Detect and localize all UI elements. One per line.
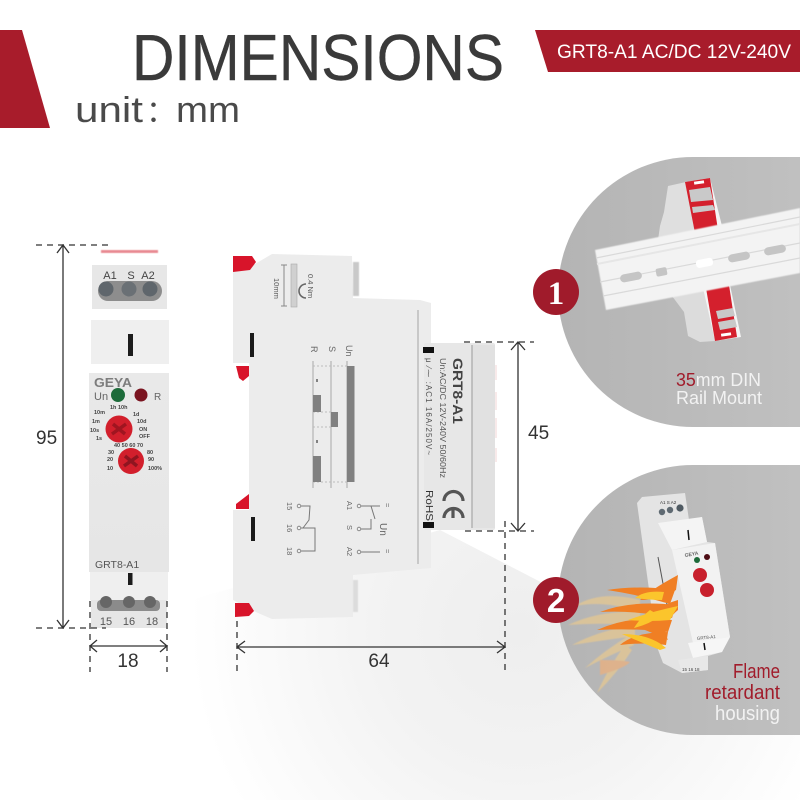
time scale labels: 10s [90,428,99,434]
dimension 45: 45 [528,423,549,444]
red corner accent [0,30,50,128]
percent scale labels: 20 [107,457,113,463]
brand logo: GEYA [94,375,133,390]
percent scale labels: 90 [148,457,154,463]
unit label: unit [75,89,143,130]
dimension 45 [464,342,549,531]
dimension 95: 95 [36,428,57,449]
wiring diagram: = [383,549,392,554]
rail caption [676,370,762,408]
time scale labels: 10d [137,419,146,425]
side view of relay [233,254,496,619]
top terminal block: A2 [141,270,155,282]
percent scale labels [107,443,162,472]
top red clip [685,178,722,234]
torque and strip note [272,264,315,307]
black markers [423,347,434,353]
status LEDs: R [154,392,161,403]
wiring diagram [285,501,392,556]
bottom terminal block: 18 [146,616,158,628]
label head [423,343,496,530]
wiring diagram: = [383,503,392,508]
mini relay [637,493,730,673]
timing diagram: S [327,346,337,352]
DIN rail [595,208,800,310]
RoHS mark: RoHS [423,490,435,521]
mini relay model: GRT8-A1 [697,634,716,641]
rail foot details [353,262,359,296]
yellow flame core [622,592,678,650]
wiring diagram: A1 [345,501,354,510]
percent scale labels: 100% [148,466,162,472]
unit label [75,89,240,130]
percent scale labels: 10 [107,466,113,472]
dimension 95 [36,245,108,628]
flame [568,575,678,693]
mini relay silhouette [637,493,730,673]
top red strip [101,250,158,253]
time scale labels: ON [139,427,147,433]
torque and strip note: 0.4 Nm [306,274,315,298]
panel background [558,157,800,427]
header [0,21,800,130]
wiring diagram: A2 [345,547,354,556]
flame caption [705,661,780,725]
divider [417,310,419,564]
number badge 1 [533,269,579,315]
bottom terminal block: 15 [100,616,112,628]
model ribbon: GRT8-A1 AC/DC 12V-240V [557,42,791,63]
upper cover block [91,320,169,364]
bottom terminal block: 16 [123,616,135,628]
flame caption: Flame [733,661,780,683]
torque and strip note: 10mm [272,278,281,299]
number badge 2: 2 [547,582,565,619]
mini relay lower block [688,637,730,658]
time scale labels: OFF [139,434,151,440]
panel background [558,465,800,735]
printed model: GRT8-A1 [450,358,465,425]
wiring diagram: 18 [285,547,294,555]
CE mark [444,492,463,518]
edge highlights [495,365,497,462]
mini relay logo: GEYA [684,551,699,559]
mini relay terminal block [678,656,708,673]
panel: DIN rail mount [533,157,800,427]
main face [89,373,169,572]
time scale labels: 1s [96,436,102,442]
rail slots [619,244,787,283]
timing diagram: R [309,346,319,353]
red clips [233,256,256,617]
status LEDs: Un [94,391,108,403]
mini relay side line [658,557,668,610]
black slots [250,333,254,357]
top terminal block: A1 [103,270,117,282]
bottom terminal block [91,596,167,628]
status LEDs [94,388,161,403]
dimension 18 [90,601,167,672]
top terminal block [92,265,167,309]
dimension 64 [237,521,505,672]
title: DIMENSIONS [132,21,504,94]
rail caption: Rail Mount [676,388,762,408]
time scale labels [90,405,151,442]
percent scale labels: 30 [108,450,114,456]
rail caption: 35mm DIN [676,370,761,390]
wiring diagram: S [345,525,354,530]
flame caption: housing [715,703,780,725]
side housing [233,254,431,619]
lower cover block [90,572,168,600]
wiring diagram: 16 [285,524,294,532]
percent scale labels: 40 50 60 70 [114,443,143,449]
time scale labels: 10m [94,410,105,416]
orange flame wisps [597,575,678,645]
dimension 18: 18 [117,651,139,672]
wiring diagram: Un [377,523,388,536]
relay behind rail [658,182,715,342]
dimension 64: 64 [368,651,390,672]
time scale labels: 1h 10h [110,405,128,411]
wiring diagram: 15 [285,502,294,510]
flame caption: retardant [705,682,780,704]
background shadow wedge [190,530,800,800]
timing diagram: Un [344,345,354,357]
mini relay middle block [658,517,707,550]
percent knob [118,448,144,474]
mini relay dials [693,554,714,597]
panel: flame retardant [533,465,800,735]
percent scale labels: 80 [147,450,153,456]
mini relay: 15 16 18 [682,667,700,672]
model label: GRT8-A1 [95,559,139,571]
time scale labels: 1m [92,419,100,425]
unit label: mm [176,89,240,130]
top terminal block: S [127,270,135,282]
pale outer flame wisps [568,596,640,693]
timing diagram [309,345,354,488]
model ribbon [535,30,800,72]
number badge 2 [533,577,579,623]
unit label: ： [146,96,176,129]
bottom red clip [703,285,741,341]
printed rating: Un:AC/DC 12V-240V 50/60Hz [438,358,448,478]
mini relay slots [688,530,705,650]
mini relay terminals [659,500,684,515]
printed contact rating: μ ⁄⁓ :AC1 16A/250V~ [424,358,433,455]
number badge 1: 1 [548,276,564,312]
mini relay face [672,543,730,643]
time scale labels: 1d [133,412,139,418]
time knob [106,416,132,442]
mini relay terminals: A1 S A2 [660,500,677,505]
front view of relay [89,250,169,628]
